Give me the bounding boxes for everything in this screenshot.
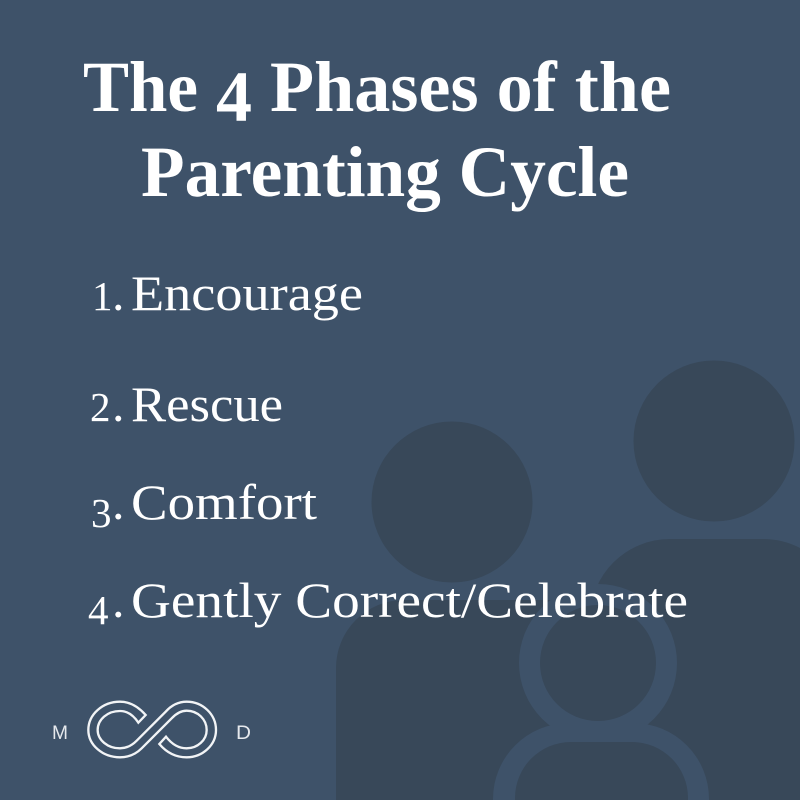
title: 4 xyxy=(216,57,252,137)
list item 4: Gently Correct/Celebrate: 4 xyxy=(88,587,108,633)
list item 2: Rescue: . xyxy=(112,376,124,432)
logo letter D: D xyxy=(236,723,251,744)
list item 4: Gently Correct/Celebrate: Gently Correct/Celebrate xyxy=(131,572,688,628)
parent figure: left xyxy=(336,422,626,800)
title xyxy=(83,47,671,212)
logo: MD infinity mark xyxy=(52,702,251,757)
list item 1: Encourage: . xyxy=(112,265,124,321)
title: Phases of the xyxy=(270,47,671,127)
title: Parenting Cycle xyxy=(141,132,629,212)
list item 3: Comfort: . xyxy=(112,474,124,530)
list item 2: Rescue: Rescue xyxy=(131,376,283,432)
title: The xyxy=(83,47,198,127)
background: family silhouette xyxy=(336,360,800,800)
list item 3: Comfort xyxy=(91,474,317,536)
list item 2: Rescue: 2 xyxy=(90,384,110,430)
logo letter M: M xyxy=(52,723,68,744)
parent figure: right xyxy=(590,360,800,800)
icon: infinity ribbon xyxy=(88,702,216,757)
list item 3: Comfort: 3 xyxy=(91,490,112,536)
child figure with halo outline xyxy=(493,584,709,800)
list item 1: Encourage: 1 xyxy=(92,273,112,319)
list item 1: Encourage: Encourage xyxy=(131,265,363,321)
list item 3: Comfort: Comfort xyxy=(131,474,317,530)
list item 4: Gently Correct/Celebrate: . xyxy=(112,572,124,628)
